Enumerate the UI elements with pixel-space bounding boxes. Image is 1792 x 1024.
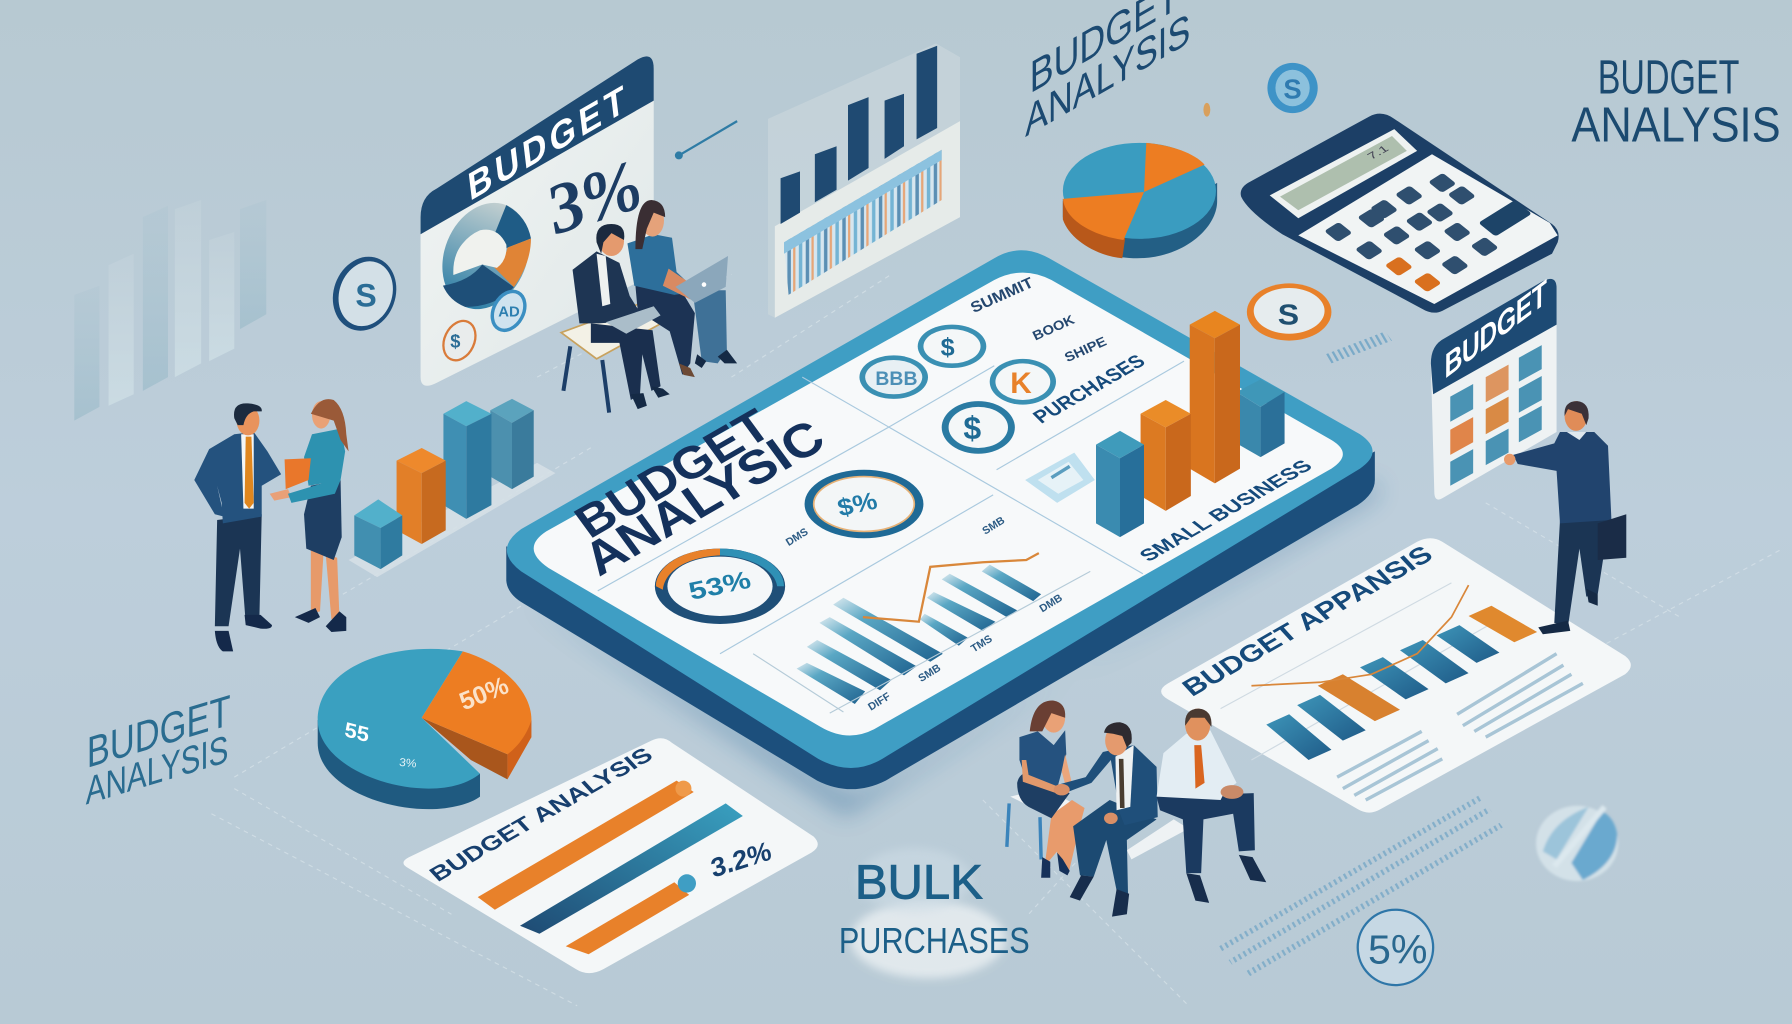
trend line [1251,585,1469,686]
dollar coin orange [1247,283,1331,341]
3d bar chart [1096,311,1285,537]
bar orange tall [1190,311,1240,483]
chair and bench [1007,789,1189,859]
bar chart left 3d [349,399,555,577]
callout: bulk purchases: PURCHASES [839,920,1030,961]
woman [627,200,737,377]
panel: budget sheet [421,56,654,386]
header text: BUDGET [1442,272,1552,385]
woman [1017,701,1085,878]
bar [397,448,446,544]
main tablet dashboard [506,250,1377,817]
calendar grid [1450,345,1542,486]
small coin icon [437,316,482,365]
man [573,224,670,409]
gauge: 59% ring: $% [835,486,880,522]
icon: blue coin [1267,63,1318,113]
ghost bar chart [74,200,266,421]
person: seated pair with laptop [561,200,737,413]
heading: budget analysic: BUDGET [565,400,781,548]
striped table [784,150,942,295]
bars [781,46,937,224]
tablet screen [534,273,1343,735]
dollar coin orange: S [1278,299,1299,331]
icon: orange circle [990,359,1056,405]
title: budget analysis left: ANALYSIS [86,728,228,814]
bars [1266,606,1537,760]
keypad [1298,154,1558,304]
small coin icon: AD [498,305,520,321]
pie chart bottom left [318,649,531,809]
tablet base [506,451,1375,789]
donut chart [427,190,544,322]
man [194,403,291,651]
icon: dollar circle lower [942,401,1015,454]
gauge: donut 53%: 53% [686,566,754,605]
icon: coin top left [323,248,406,340]
card heading: BUDGET ANALYSIS [424,743,658,886]
callout: bulk purchases: BULK [855,856,983,909]
label: purchases: PURCHASES [1028,351,1150,427]
small labels: SHIPE [1062,333,1109,365]
pie labels [343,671,513,770]
woman [285,399,349,632]
gauge: donut 53% [655,549,785,624]
bar [490,399,534,489]
pie chart top [1063,143,1217,258]
small labels [968,274,1109,365]
panel: budget appraisal card [1161,538,1631,813]
badge: 5%: 5% [1368,926,1427,972]
icon: coin top left: S [355,277,377,313]
text lines [1337,654,1583,800]
bar teal back [1237,379,1285,457]
calculator [1241,114,1559,313]
percent label: 3.2% [708,836,774,884]
hatch mark [1326,331,1392,363]
laptop [675,256,728,303]
panel: budget bars card [403,738,818,973]
title: budget analysis left: BUDGET [87,687,231,778]
stool [561,299,667,413]
line and bar chart: DMB [1038,592,1065,615]
title: budget analysis top right: BUDGET [1598,52,1739,105]
small labels: BOOK [1030,312,1077,343]
hatched text stripes [1217,795,1503,976]
line and bar chart: DIFF [866,690,893,713]
line and bar chart: DMS [784,526,810,549]
icon: document [1025,453,1095,503]
bar [354,499,402,569]
heading: budget analysic: ANALYSIC [573,410,835,586]
bar orange mid [1141,400,1191,511]
trend line [863,553,1039,622]
card heading: BUDGET APPANSIS [1177,541,1439,702]
line and bar chart [753,514,1090,713]
pie labels: 55 [343,717,370,747]
icon: dollar circle [918,325,986,368]
small coin icon [486,286,531,336]
screen: 7.1 [1365,143,1391,162]
bar [443,401,491,519]
line and bar chart: SMB [916,662,943,685]
small labels: SUMMIT [968,274,1036,317]
person group: seated trio [1007,701,1266,917]
percent label: 3% [536,146,651,250]
callout: bulk purchases [839,848,1030,978]
man right [1157,709,1266,903]
label: small business: SMALL BUSINESS [1134,456,1317,565]
arrow: pointer [675,121,737,159]
panel: budget calendar [1431,272,1557,500]
panel: floating bar chart [768,43,960,318]
person: man and woman talking [194,399,349,651]
bar teal front [1096,431,1144,537]
title: budget analysis top right [1571,52,1781,153]
screen [1270,129,1417,218]
icon: dollar circle: $ [941,333,955,361]
line and bar chart: SMB [980,514,1007,537]
icon: blue coin: S [1283,73,1302,104]
icon: document circle: BBB [875,368,917,390]
small coin icon: $ [450,330,460,351]
icon: orange circle: K [1010,367,1032,400]
icon: document circle [859,355,928,399]
title: budget analysis left [86,687,231,814]
person: man presenting [1504,401,1626,634]
line and bar chart: TMS [969,633,995,655]
pie labels: 50% [455,671,513,716]
icon: dollar circle lower: $ [963,410,981,446]
icon: translucent coin [1536,806,1618,881]
pie labels: 3% [399,756,417,770]
badge: 5% [1358,910,1433,985]
icon: small orange mark [1203,103,1210,117]
man middle [1054,722,1158,917]
gauge: 59% ring [805,470,923,538]
tablet frame [507,250,1373,768]
header text: BUDGET [466,78,627,210]
